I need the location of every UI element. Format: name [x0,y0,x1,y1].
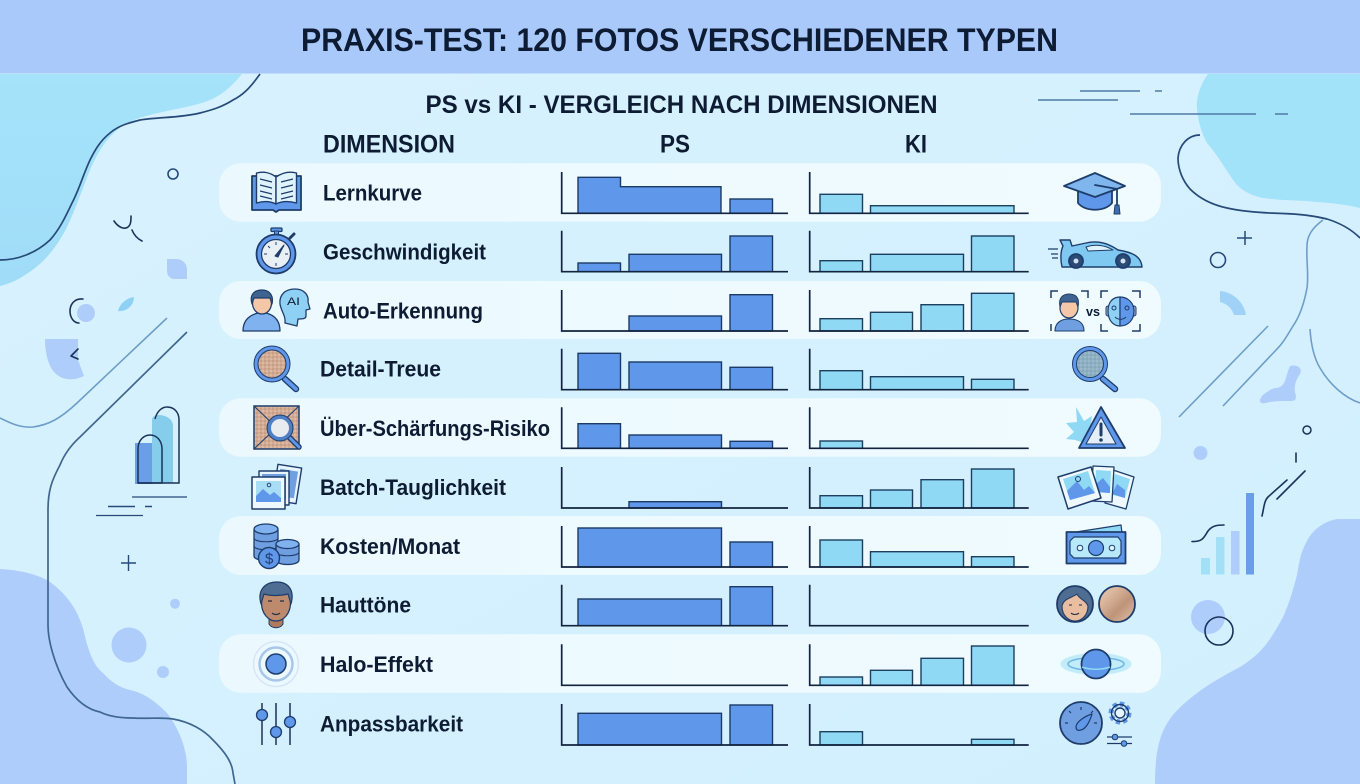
row: Kosten/Monat [219,516,1161,575]
icon: banknote [1066,525,1126,564]
row: Anpassbarkeit [256,702,1132,746]
icon: magnifier with fine grain [1072,346,1115,389]
label: Detail-Treue [320,357,441,382]
icon: person and AI head: AI [287,296,300,308]
row: Detail-Treue [254,346,1115,390]
KI chart [810,349,1029,390]
icon: open book [252,172,301,212]
label: Lernkurve [323,181,422,206]
KI chart [810,172,1029,213]
label: Kosten/Monat [320,534,460,559]
PS chart [562,526,788,567]
icon: planet with halo rings [1060,650,1132,678]
label: Halo-Effekt [320,652,433,677]
icon: person vs robot: vs [1086,305,1100,319]
PS chart [562,172,788,213]
icon: graduation cap [1064,173,1125,214]
row: Hauttöne [260,582,1135,628]
label: Hauttöne [320,593,411,618]
KI chart [810,407,1029,448]
icon: over-sharpened texture with magnifier [254,406,299,449]
icon: warning triangle with burst [1066,407,1125,448]
KI chart [810,231,1029,272]
decorative lines right [1178,135,1360,238]
blob: bottom left [0,569,187,784]
PS chart [562,290,788,331]
blob: top right [1197,74,1360,208]
icon: person and AI head [243,289,310,331]
blob: bottom right [1155,519,1360,784]
KI chart [810,644,1029,685]
icon: halo circle [254,642,298,686]
row: Lernkurve [219,163,1161,222]
subtitle: PS vs KI - VERGLEICH NACH DIMENSIONEN [426,91,938,119]
PS chart [562,349,788,390]
PS chart [562,467,788,508]
label: Anpassbarkeit [320,712,463,737]
column heading: dimension: DIMENSION [323,130,455,158]
KI chart [810,585,1029,626]
label: Über-Schärfungs-Risiko [320,416,550,441]
label: Geschwindigkeit [323,239,486,264]
row: Halo-Effekt [219,634,1161,693]
KI chart [810,704,1029,745]
column heading: KI: KI [905,130,927,158]
row: Über-Schärfungs-Risiko [219,398,1161,457]
icon: face and skin swatch [1057,586,1135,622]
icon: face [260,582,292,628]
KI chart [810,290,1029,331]
icon: stopwatch [256,228,296,274]
label: Batch-Tauglichkeit [320,475,506,500]
PS chart [562,704,788,745]
row: Auto-Erkennung [219,281,1161,339]
icon: decorative bar chart right [1192,493,1254,574]
icon: coins: $ [265,550,274,568]
header bar [0,0,1360,74]
row: Batch-Tauglichkeit [252,464,1134,509]
PS chart [562,644,788,685]
column heading: PS: PS [660,130,690,158]
PS chart [562,407,788,448]
KI chart [810,467,1029,508]
icon: decorative bar chart left [135,407,179,484]
decoration: right side shapes [1191,231,1311,645]
PS chart [562,231,788,272]
PS chart [562,585,788,626]
label: Auto-Erkennung [323,298,483,323]
KI chart [810,526,1029,567]
icon: photo stack [252,464,302,509]
row: Geschwindigkeit [256,228,1142,274]
blob: top left [0,74,242,286]
icon: gauge, gear and sliders [1060,702,1132,746]
decoration: left side shapes [45,169,187,678]
icon: scattered photos [1058,466,1134,509]
decorative lines left [0,74,260,260]
icon: magnifier with texture [254,346,296,389]
icon: sports car [1048,240,1142,268]
icon: coins [254,524,299,568]
icon: sliders [256,703,296,745]
title: PRAXIS-TEST: 120 FOTOS VERSCHIEDENER TYPEN [301,22,1058,58]
icon: person vs robot [1051,291,1140,331]
